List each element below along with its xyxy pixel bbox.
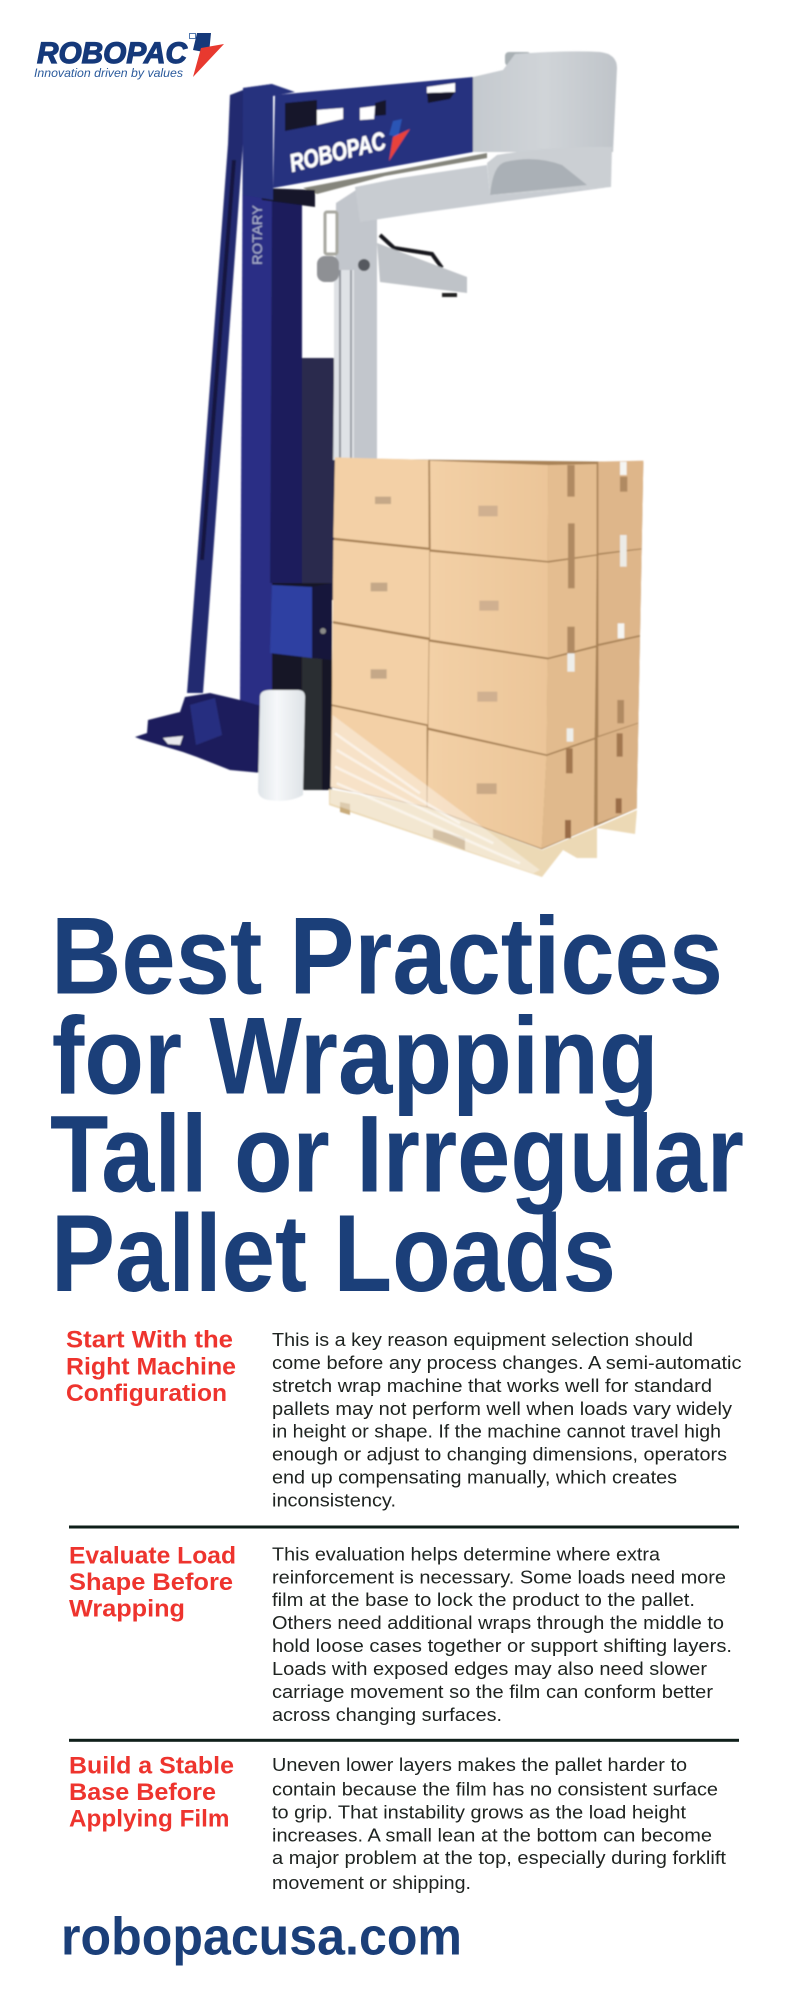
body text — [272, 1329, 742, 1510]
mast column — [240, 84, 335, 710]
body text: This is a key reason equipment selection should — [272, 1329, 693, 1350]
body text: end up compensating manually, which creates — [272, 1466, 677, 1488]
lower blue control box — [270, 583, 332, 790]
body text: movement or shipping. — [272, 1872, 471, 1893]
body text: enough or adjust to changing dimensions, operators — [272, 1444, 727, 1464]
logo: Robopac: ROBOPAC — [37, 37, 188, 70]
body text — [272, 1754, 726, 1893]
blue top arm — [243, 77, 473, 200]
footer website URL: robopacusa.com — [61, 1908, 462, 1966]
roll of stretch film — [258, 690, 305, 801]
heading — [69, 1752, 234, 1833]
body text: a major problem at the top, especially during forklift — [272, 1847, 726, 1868]
logo: Robopac: Innovation driven by values — [34, 66, 183, 80]
body text: film at the base to lock the product to the pallet. — [272, 1589, 695, 1610]
main title: for Wrapping — [52, 995, 659, 1117]
body text: Uneven lower layers makes the pallet harder to — [272, 1754, 687, 1775]
heading — [66, 1327, 236, 1407]
body text: hold loose cases together or support shifting layers. — [272, 1635, 732, 1656]
gray head unit — [473, 51, 617, 195]
pallet — [329, 789, 637, 877]
body text: carriage movement so the film can conform better — [272, 1681, 713, 1702]
logo: Robopac — [34, 33, 224, 80]
section 2: Evaluate Load Shape Before Wrapping — [69, 1542, 732, 1725]
heading: Configuration — [66, 1380, 227, 1407]
heading: Applying Film — [69, 1806, 230, 1833]
heading: Wrapping — [69, 1596, 185, 1623]
heading: Evaluate Load — [69, 1542, 236, 1569]
body text: Others need additional wraps through the middle to — [272, 1612, 724, 1633]
body text: across changing surfaces. — [272, 1704, 502, 1725]
body text: stretch wrap machine that works well for standard — [272, 1375, 712, 1396]
body text — [272, 1543, 732, 1725]
body text: reinforcement is necessary. Some loads need more — [272, 1566, 726, 1587]
heading: Build a Stable — [69, 1752, 234, 1780]
heading: Base Before — [69, 1779, 216, 1806]
main title: Best Practices — [51, 895, 723, 1017]
photo: rotary stretch wrap machine with pallet load — [135, 51, 643, 877]
front left column — [333, 457, 429, 548]
body text: increases. A small lean at the bottom can become — [272, 1824, 712, 1845]
body text: in height or shape. If the machine cannot travel high — [272, 1421, 721, 1442]
far side column — [598, 461, 643, 553]
front middle column — [430, 461, 548, 561]
diagonal brace — [187, 90, 243, 693]
main title — [50, 895, 744, 1315]
stacked cartons — [331, 457, 643, 849]
arm underside and bracket — [260, 153, 487, 207]
body text: This evaluation helps determine where extra — [272, 1543, 661, 1564]
carton seam backing — [331, 459, 643, 849]
main title: Pallet Loads — [51, 1193, 616, 1315]
heading — [69, 1542, 236, 1623]
section 1: Start With the Right Machine Configuration — [66, 1327, 742, 1510]
side column — [548, 464, 597, 561]
body text: contain because the film has no consistent surface — [272, 1778, 718, 1800]
body text: pallets may not perform well when loads vary widely — [272, 1398, 733, 1419]
gray lower arm — [355, 165, 610, 222]
body text: Loads with exposed edges may also need slower — [272, 1658, 707, 1679]
mast column: ROTARY — [249, 204, 265, 265]
body text: to grip. That instability grows as the load height — [272, 1801, 686, 1822]
stretch film wrap on lower layer — [330, 715, 540, 873]
blue top arm: ROBOPAC — [287, 127, 389, 178]
machine base plate — [135, 693, 265, 773]
heading: Right Machine — [66, 1353, 236, 1380]
heading: Start With the — [66, 1327, 233, 1354]
gray mast and rails — [317, 190, 377, 460]
heading: Shape Before — [69, 1569, 233, 1596]
body text: inconsistency. — [272, 1490, 396, 1510]
body text: come before any process changes. A semi-automatic — [272, 1352, 742, 1373]
carriage arm with cable — [358, 235, 467, 297]
tape strips, labels and carton marks — [371, 462, 627, 838]
section 3: Build a Stable Base Before Applying Film — [69, 1752, 726, 1893]
